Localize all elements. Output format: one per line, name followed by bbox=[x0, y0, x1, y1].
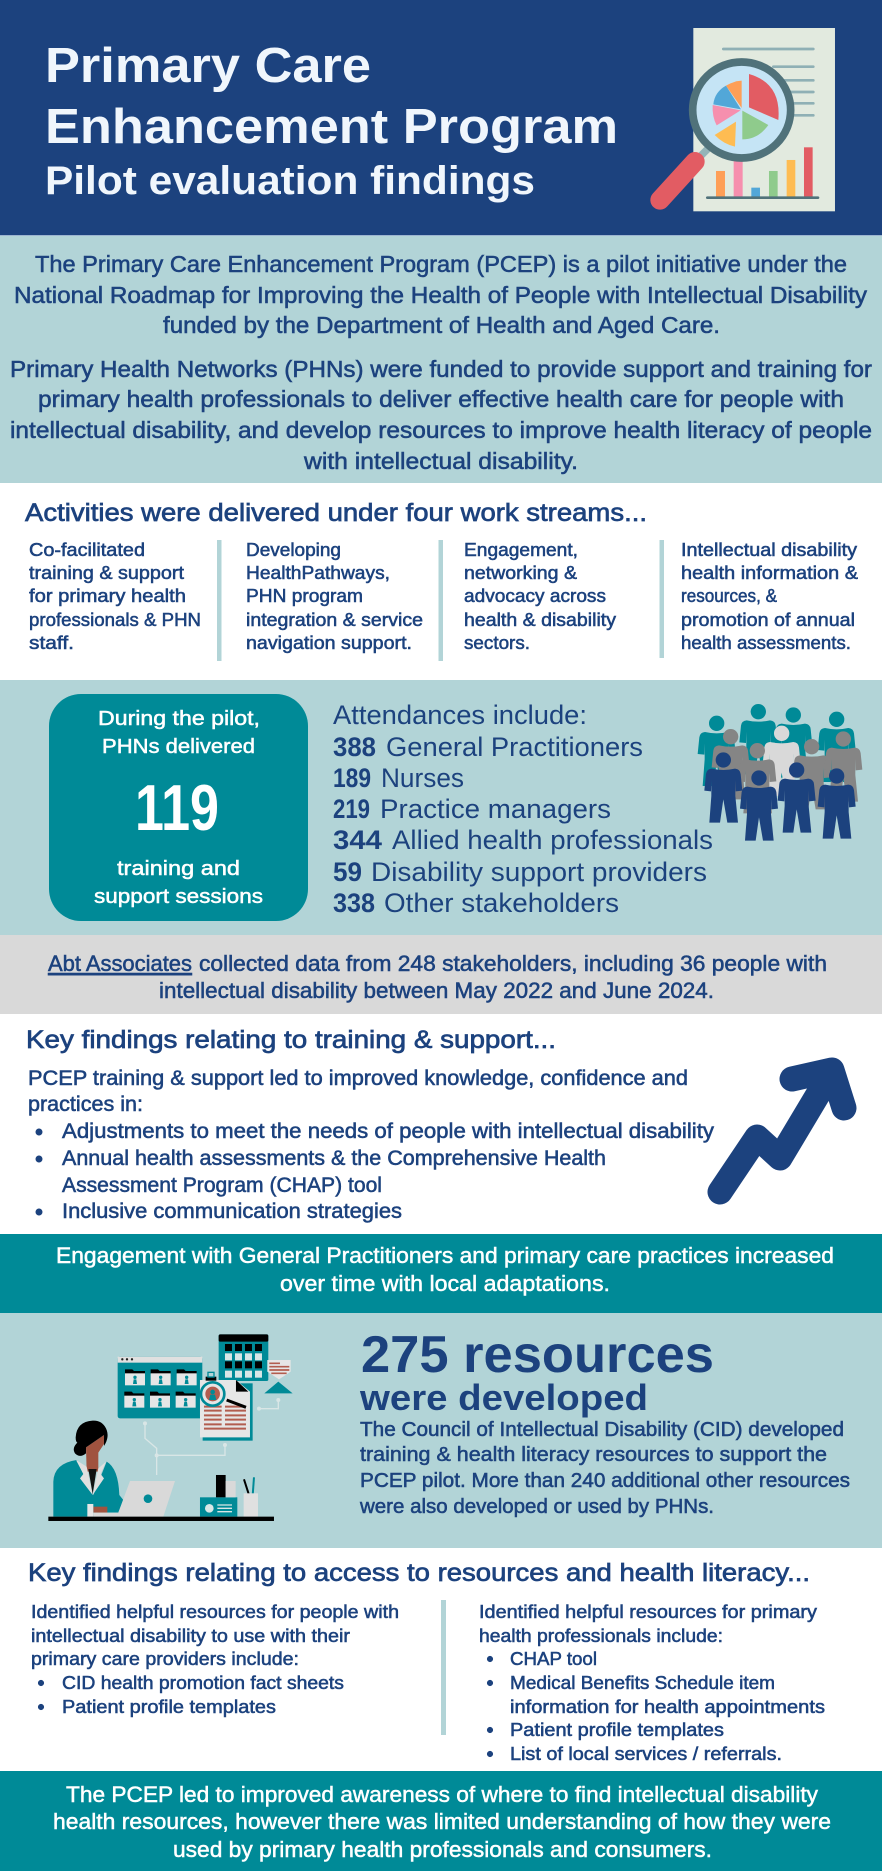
panel: engagement callout: Engagement with General Practitioners and primary care practices increased bbox=[56, 1243, 834, 1268]
text block: stream 1: staff. bbox=[29, 632, 74, 653]
text block: stream 3 bbox=[464, 539, 617, 653]
panel: conclusion callout bbox=[0, 1771, 882, 1871]
text block: resources for primary health professionals: health professionals include: bbox=[479, 1625, 723, 1646]
text block: stream 4 bbox=[681, 539, 859, 653]
text block: stream 4: Intellectual disability bbox=[681, 539, 858, 560]
list: training outcomes bbox=[36, 1120, 715, 1223]
text block: program description bbox=[14, 251, 868, 338]
panel: work streams bbox=[0, 483, 882, 680]
heading: work streams: Activities were delivered under four work streams... bbox=[25, 499, 647, 527]
list: attendances: 344 bbox=[333, 825, 382, 855]
callout: 119 sessions: During the pilot, bbox=[98, 707, 260, 730]
text block: stream 2: HealthPathways, bbox=[246, 562, 390, 583]
text block: stream 1: training & support bbox=[29, 562, 184, 583]
panel: engagement callout: over time with local adaptations. bbox=[280, 1271, 610, 1296]
statistic: 275 resources: 275 resources bbox=[361, 1326, 714, 1384]
panel: conclusion callout: The PCEP led to improved awareness of where to find intellectual disability bbox=[66, 1782, 819, 1807]
list: attendances: Other stakeholders bbox=[384, 888, 619, 918]
text block: resources for people with intellectual disability: Identified helpful resources for people with bbox=[31, 1601, 399, 1622]
list: attendances: 338 bbox=[333, 888, 375, 918]
panel: training findings bbox=[0, 1014, 882, 1234]
callout: 119 sessions bbox=[49, 694, 308, 921]
panel: engagement callout bbox=[0, 1234, 882, 1313]
text block: stream 1 bbox=[29, 539, 201, 653]
text block: stream 3: sectors. bbox=[464, 632, 530, 653]
heading: training findings: Key findings relating to training & support... bbox=[26, 1026, 556, 1054]
list: training outcomes: Inclusive communication strategies bbox=[62, 1200, 402, 1223]
text block: stream 4: promotion of annual bbox=[681, 609, 855, 630]
text block: resources for primary health professionals: information for health appointments bbox=[510, 1696, 825, 1717]
panel: resources developed bbox=[0, 1313, 882, 1548]
statistic: 275 resources: were developed bbox=[359, 1377, 648, 1418]
text block: resources for primary health professionals: Patient profile templates bbox=[510, 1719, 724, 1740]
text block: stream 2: PHN program bbox=[246, 585, 363, 606]
text block: resources for people with intellectual disability: Patient profile templates bbox=[62, 1696, 276, 1717]
text block: stream 3: health & disability bbox=[464, 609, 617, 630]
text block: stream 2: integration & service bbox=[246, 609, 423, 630]
text block: stream 2: navigation support. bbox=[246, 632, 412, 653]
panel: access findings bbox=[0, 1548, 882, 1772]
text block: resources description: training & health literacy resources to support the bbox=[360, 1443, 827, 1466]
title: Primary Care bbox=[45, 39, 371, 93]
list: attendances: General Practitioners bbox=[386, 732, 643, 762]
text block: resources description: The Council of Intellectual Disability (CID) developed bbox=[360, 1418, 844, 1441]
list: attendances bbox=[333, 700, 713, 918]
heading: access findings: Key findings relating to access to resources and health literacy... bbox=[28, 1559, 810, 1587]
text block: resources for people with intellectual disability: primary care providers include: bbox=[31, 1648, 299, 1669]
text block: PHN funding: primary health professionals to deliver effective health care for people with bbox=[38, 386, 844, 412]
text block: stream 2 bbox=[246, 539, 423, 653]
text block: resources for people with intellectual disability: CID health promotion fact sheets bbox=[62, 1672, 344, 1693]
list: attendances: Practice managers bbox=[380, 794, 611, 824]
text block: program description: funded by the Department of Health and Aged Care. bbox=[163, 312, 720, 338]
text block: PHN funding: with intellectual disability. bbox=[303, 448, 578, 474]
icon: rising arrow bbox=[720, 1070, 844, 1192]
list: attendances: Disability support providers bbox=[371, 857, 707, 887]
panel: data collection note: Abt Associates bbox=[48, 951, 192, 976]
list: attendances: Attendances include: bbox=[333, 700, 587, 730]
text block: training intro: practices in: bbox=[28, 1093, 143, 1116]
panel: conclusion callout: health resources, however there was limited understanding of how they were bbox=[53, 1809, 831, 1834]
text block: resources for people with intellectual disability: intellectual disability to use with their bbox=[31, 1625, 350, 1646]
text block: PHN funding: intellectual disability, and develop resources to improve health literacy of people bbox=[10, 417, 872, 443]
panel: introduction bbox=[0, 235, 882, 483]
callout: 119 sessions: support sessions bbox=[94, 885, 263, 908]
list: attendances: 388 bbox=[333, 732, 376, 762]
panel: data collection note bbox=[0, 935, 882, 1014]
text block: resources for primary health professionals bbox=[479, 1601, 825, 1764]
text block: program description: The Primary Care Enhancement Program (PCEP) is a pilot initiative under the bbox=[35, 251, 847, 277]
text block: training intro: PCEP training & support led to improved knowledge, confidence and bbox=[28, 1067, 688, 1090]
title: Pilot evaluation findings bbox=[45, 159, 535, 203]
text block: resources for primary health professionals: Identified helpful resources for primary bbox=[479, 1601, 818, 1622]
list: attendances: Allied health professionals bbox=[392, 825, 713, 855]
text block: stream 3: networking & bbox=[464, 562, 578, 583]
callout: 119 sessions: PHNs delivered bbox=[102, 735, 255, 758]
panel: sessions and attendances bbox=[0, 680, 882, 935]
list: training outcomes: Assessment Program (CHAP) tool bbox=[62, 1174, 382, 1197]
panel: data collection note: collected data from 248 stakeholders, including 36 people with bbox=[199, 951, 827, 976]
icon: report with magnifying glass bbox=[660, 28, 835, 211]
panel: conclusion callout: used by primary health professionals and consumers. bbox=[173, 1837, 712, 1862]
text block: stream 1: for primary health bbox=[29, 585, 186, 606]
text block: stream 3: advocacy across bbox=[464, 585, 606, 606]
text block: stream 3: Engagement, bbox=[464, 539, 578, 560]
text block: program description: National Roadmap for Improving the Health of People with Intellectual Disability bbox=[14, 282, 868, 308]
title: Enhancement Program bbox=[45, 100, 618, 154]
text block: stream 1: professionals & PHN bbox=[29, 609, 201, 630]
text block: stream 4: health assessments. bbox=[681, 632, 851, 653]
text block: resources description: were also developed or used by PHNs. bbox=[359, 1495, 714, 1518]
panel: header bbox=[0, 0, 882, 235]
text block: stream 4: resources, & bbox=[681, 585, 778, 606]
text block: resources for primary health professionals: List of local services / referrals. bbox=[510, 1743, 782, 1764]
callout: 119 sessions: training and bbox=[117, 857, 240, 880]
text block: resources description bbox=[359, 1418, 850, 1518]
text block: stream 2: Developing bbox=[246, 539, 341, 560]
callout: 119 sessions: 119 bbox=[135, 771, 219, 844]
text block: stream 1: Co-facilitated bbox=[29, 539, 145, 560]
list: attendances: 189 bbox=[333, 763, 371, 793]
panel: data collection note: intellectual disability between May 2022 and June 2024. bbox=[159, 978, 714, 1003]
text block: resources for primary health professionals: CHAP tool bbox=[510, 1648, 597, 1669]
illustration: woman at desk with documents bbox=[48, 1334, 293, 1521]
list: training outcomes: Annual health assessments & the Comprehensive Health bbox=[62, 1147, 606, 1170]
text block: resources for primary health professionals: Medical Benefits Schedule item bbox=[510, 1672, 775, 1693]
text block: PHN funding bbox=[10, 356, 872, 474]
text block: training intro bbox=[28, 1067, 688, 1116]
list: attendances: Nurses bbox=[381, 763, 464, 793]
statistic: 275 resources bbox=[359, 1326, 714, 1418]
list: training outcomes: Adjustments to meet the needs of people with intellectual disability bbox=[62, 1120, 715, 1143]
title bbox=[45, 39, 618, 203]
text block: PHN funding: Primary Health Networks (PHNs) were funded to provide support and training for bbox=[10, 356, 872, 382]
text block: resources description: PCEP pilot. More than 240 additional other resources bbox=[360, 1469, 850, 1492]
icon: group of people bbox=[698, 704, 862, 841]
list: attendances: 219 bbox=[333, 794, 370, 824]
text block: stream 4: health information & bbox=[681, 562, 859, 583]
list: attendances: 59 bbox=[333, 857, 362, 887]
text block: resources for people with intellectual disability bbox=[31, 1601, 399, 1717]
